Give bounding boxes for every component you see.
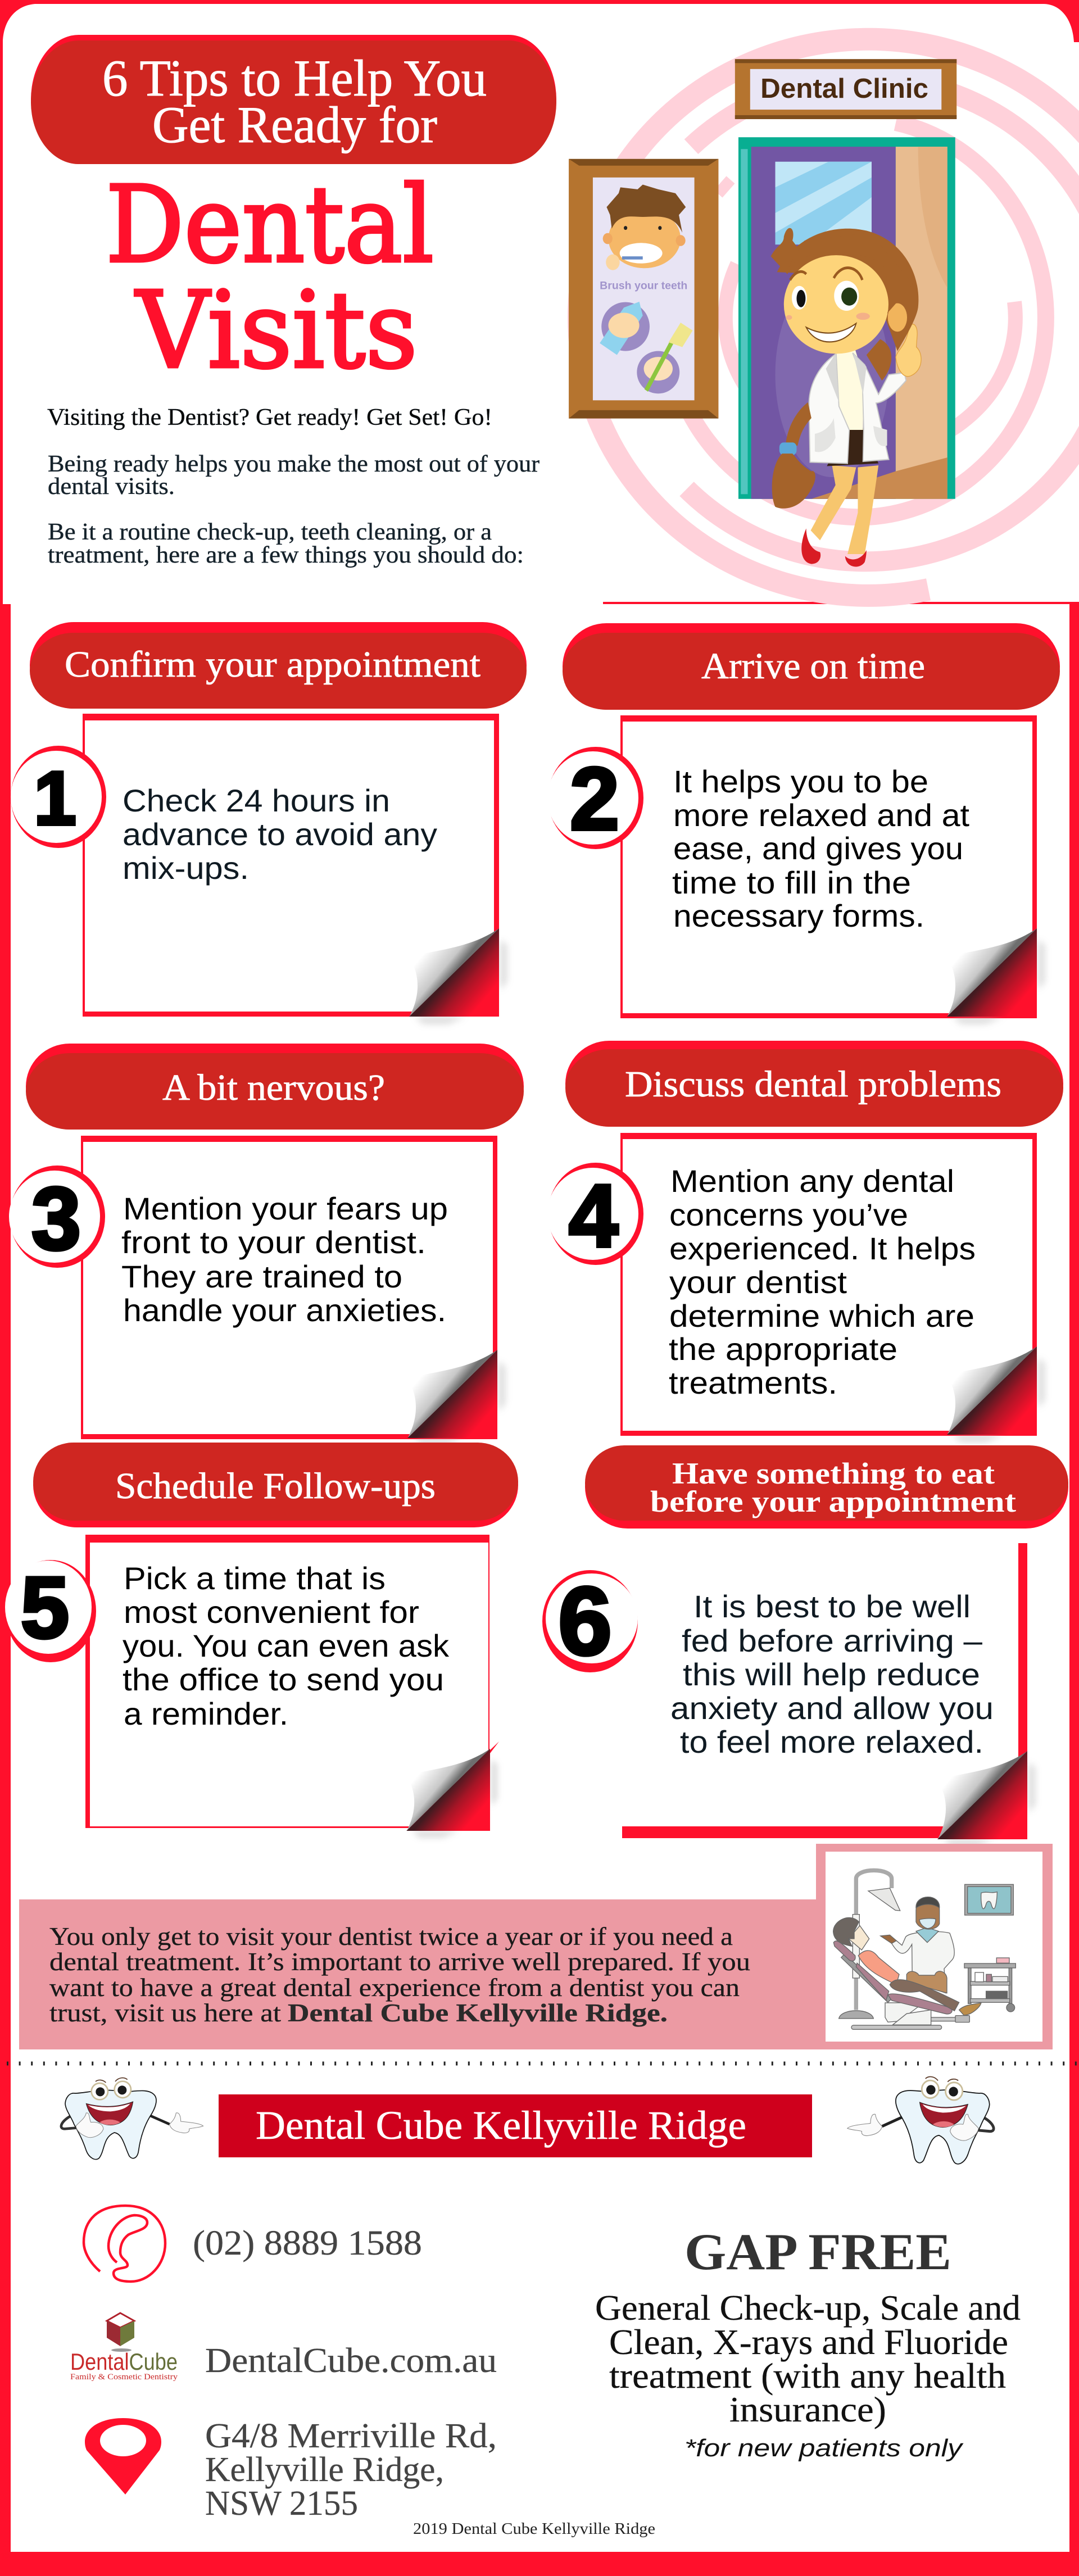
tip 3 text — [121, 1191, 448, 1328]
tip 6 heading pill: before your appointment — [650, 1485, 1016, 1518]
tip 1 text: advance to avoid any — [123, 817, 437, 852]
tip 5 heading pill: Schedule Follow-ups — [115, 1466, 436, 1507]
closing text: Dental Cube Kellyville Ridge. — [288, 1999, 668, 2027]
closing text: trust, visit us here at — [49, 1999, 282, 2027]
tip 4 text: your dentist — [669, 1264, 847, 1300]
background spiral — [579, 39, 1079, 596]
tip 2 text — [672, 764, 969, 933]
tip 3 heading pill — [26, 1044, 524, 1130]
tip 4 text: concerns you’ve — [669, 1197, 908, 1232]
title pill: 6 Tips to Help You — [102, 49, 487, 107]
sign: Dental Clinic — [735, 59, 956, 119]
tip 3 card — [81, 1136, 505, 1445]
number 3 badge: 3 — [31, 1169, 81, 1268]
intro text — [47, 405, 540, 568]
copyright: 2019 Dental Cube Kellyville Ridge — [413, 2520, 655, 2538]
number 3 badge — [9, 1165, 105, 1268]
icon: Dental Cube logo: Family & Cosmetic Dentistry — [70, 2373, 178, 2382]
number 5 badge — [5, 1559, 96, 1662]
closing panel — [19, 1844, 1053, 2049]
dotted divider — [7, 2061, 1079, 2066]
tip 2 text: necessary forms. — [673, 898, 924, 933]
tip 1 text — [123, 783, 437, 886]
offer details: Clean, X-rays and Fluoride — [609, 2323, 1008, 2362]
website: DentalCube.com.au — [205, 2342, 497, 2380]
illustration: dental clinic door, sign, poster and dentist — [569, 59, 956, 566]
tip 2 text: time to fill in the — [672, 865, 911, 900]
title pill: Get Ready for — [152, 96, 437, 153]
tip 3 text: front to your dentist. — [121, 1224, 426, 1260]
icon: phone — [84, 2206, 165, 2282]
tip 5 text: a reminder. — [124, 1696, 288, 1731]
tip 1 text: mix-ups. — [123, 850, 249, 886]
number 6 badge: 6 — [558, 1567, 612, 1675]
icon: Dental Cube logo: DentalCube — [70, 2348, 178, 2375]
tip 6 text: to feel more relaxed. — [680, 1724, 983, 1759]
title: Dental Visits: Dental — [106, 164, 434, 287]
number 1 badge — [11, 746, 106, 848]
tip 4 text: the appropriate — [669, 1331, 897, 1367]
number 6 badge — [542, 1567, 638, 1675]
tip 3 text: handle your anxieties. — [123, 1292, 446, 1328]
address: G4/8 Merriville Rd, — [205, 2417, 497, 2455]
address — [205, 2417, 497, 2523]
tip 1 heading pill — [30, 622, 527, 709]
closing text: want to have a great dental experience from a dentist you can — [49, 1974, 740, 2002]
tip 5 text: most convenient for — [124, 1594, 419, 1630]
banner: Dental Cube Kellyville Ridge — [256, 2103, 746, 2148]
title pill — [31, 35, 556, 164]
tip 4 text: experienced. It helps — [669, 1231, 976, 1266]
tip 4 text — [669, 1163, 976, 1400]
offer: GAP FREE: GAP FREE — [684, 2223, 951, 2280]
intro text: Be it a routine check-up, teeth cleaning, or a — [48, 519, 492, 545]
title: Dental Visits — [106, 164, 434, 392]
closing text: You only get to visit your dentist twice a year or if you need a — [49, 1922, 733, 1951]
number 2 badge — [547, 747, 643, 849]
icon: tooth mascot left — [61, 2078, 203, 2160]
address: Kellyville Ridge, — [205, 2451, 444, 2489]
number 1 badge: 1 — [34, 756, 76, 841]
tip 1 text: Check 24 hours in — [123, 783, 390, 818]
icon: location pin — [85, 2418, 161, 2495]
phone number: (02) 8889 1588 — [193, 2224, 422, 2262]
tip 3 text: They are trained to — [121, 1259, 402, 1294]
intro text: treatment, here are a few things you should do: — [48, 542, 524, 568]
address: NSW 2155 — [205, 2484, 358, 2523]
offer details — [595, 2288, 1021, 2462]
tip 6 text: fed before arriving – — [682, 1623, 983, 1658]
tip 5 heading pill — [33, 1443, 518, 1527]
tip 6 heading pill — [585, 1445, 1068, 1529]
tip 4 text: treatments. — [669, 1365, 837, 1400]
tip 2 heading pill — [563, 623, 1060, 710]
tip 2 text: ease, and gives you — [673, 831, 963, 866]
sign: Dental Clinic: Dental Clinic — [760, 72, 928, 104]
tip 3 heading pill: A bit nervous? — [162, 1067, 385, 1108]
poster: brush your teeth — [569, 159, 718, 419]
closing text: dental treatment. It’s important to arrive well prepared. If you — [49, 1948, 750, 1976]
intro text: Being ready helps you make the most out of your — [48, 451, 540, 477]
tip 6 text: It is best to be well — [693, 1589, 971, 1624]
title: Dental Visits: Visits — [135, 269, 418, 392]
tip 1 card — [83, 714, 507, 1024]
tip 6 card — [622, 1543, 1035, 1847]
tip 6 heading pill: Have something to eat — [672, 1457, 995, 1490]
offer: GAP FREE — [595, 2223, 1021, 2462]
number 5 badge: 5 — [21, 1559, 69, 1656]
tip 2 text: more relaxed and at — [673, 797, 969, 833]
number 2 badge: 2 — [570, 750, 619, 849]
tip 5 text: Pick a time that is — [124, 1561, 386, 1596]
intro text: dental visits. — [48, 474, 175, 500]
closing text — [49, 1922, 750, 2027]
tip 5 card — [85, 1535, 499, 1838]
number 4 badge: 4 — [569, 1167, 618, 1266]
offer details: General Check-up, Scale and — [595, 2288, 1021, 2328]
tip 4 heading pill — [565, 1041, 1063, 1127]
intro text: Visiting the Dentist? Get ready! Get Set! Go! — [47, 405, 492, 430]
tip 3 text: Mention your fears up — [123, 1191, 448, 1226]
tip 5 text — [123, 1561, 450, 1731]
tip 4 card — [620, 1133, 1045, 1442]
offer details: treatment (with any health — [609, 2356, 1006, 2396]
banner — [219, 2094, 812, 2157]
offer details: insurance) — [729, 2390, 886, 2429]
tip 4 heading pill: Discuss dental problems — [625, 1064, 1001, 1105]
dentist character — [771, 228, 921, 566]
tip 2 heading pill: Arrive on time — [701, 646, 925, 687]
tip 4 text: Mention any dental — [670, 1163, 954, 1199]
tip 6 text — [670, 1589, 994, 1759]
tip 5 text: you. You can even ask — [123, 1628, 450, 1663]
illustration: dentist treating a patient — [833, 1870, 1015, 2029]
icon: Dental Cube logo — [70, 2313, 178, 2382]
offer details: *for new patients only — [684, 2434, 964, 2462]
tip 5 text: the office to send you — [123, 1662, 444, 1697]
number 4 badge — [547, 1163, 643, 1266]
tip 2 card — [620, 715, 1045, 1024]
door — [738, 137, 955, 499]
tip 2 text: It helps you to be — [673, 764, 928, 799]
icon: tooth mascot right — [847, 2077, 994, 2164]
tip 6 text: this will help reduce — [683, 1657, 980, 1692]
poster: brush your teeth: Brush your teeth — [600, 279, 687, 292]
tip 1 heading pill: Confirm your appointment — [65, 644, 480, 685]
tip 4 text: determine which are — [669, 1298, 974, 1334]
tip 6 text: anxiety and allow you — [670, 1690, 994, 1726]
